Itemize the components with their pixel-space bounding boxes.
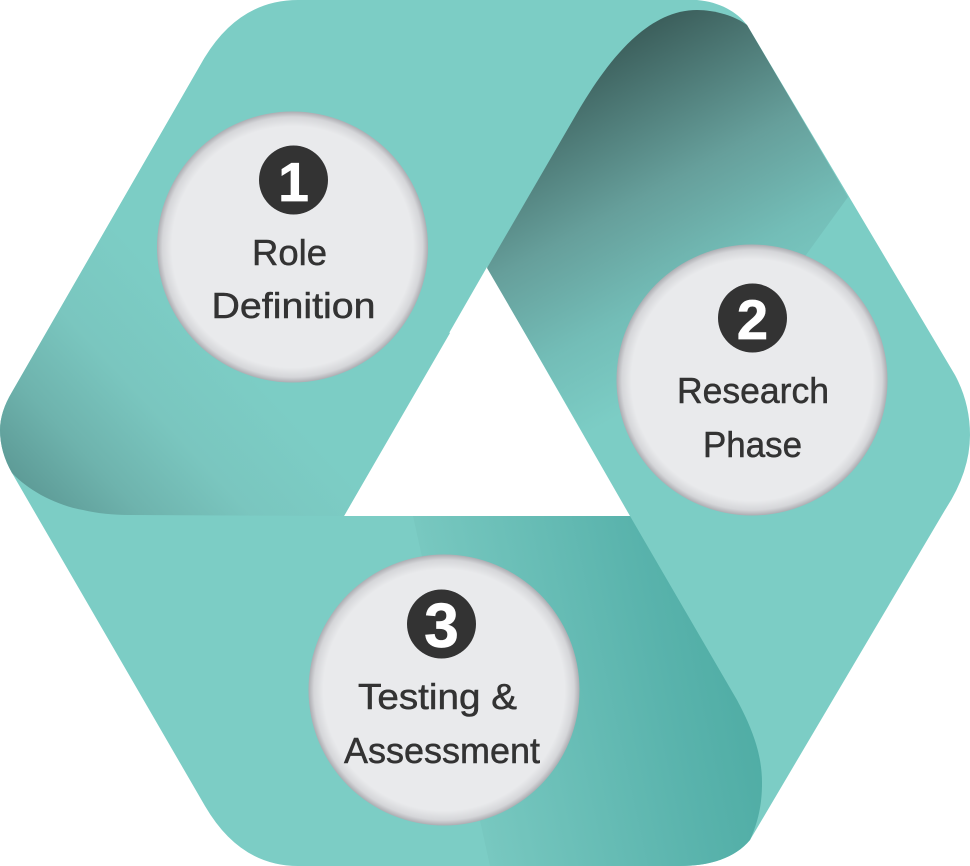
step 2 label: Research — [677, 370, 829, 411]
step 1 disc — [157, 112, 428, 382]
step 2 label: Phase — [703, 424, 802, 465]
step 2 number badge — [718, 284, 787, 352]
step 1 number badge — [259, 146, 328, 214]
step 1 label: Definition — [212, 285, 376, 326]
shaded fold: top right — [487, 10, 848, 505]
shaded fold: lower left — [0, 57, 450, 516]
step 3 label: Assessment — [344, 730, 540, 771]
step 1 label — [212, 232, 376, 326]
step 2 number badge: 2 — [737, 288, 768, 351]
step 3 label: Testing & — [358, 676, 517, 717]
step 2 label — [677, 370, 829, 465]
step 3 number badge — [407, 590, 476, 661]
step 1: Role Definition — [157, 112, 428, 382]
step 1 number badge: 1 — [278, 151, 309, 213]
shaded fold: lower right — [413, 516, 762, 866]
step 3 label — [344, 676, 540, 771]
step 1 label: Role — [252, 232, 327, 273]
step 2 disc — [616, 244, 888, 516]
center white triangle — [344, 267, 630, 516]
step 3 number badge: 3 — [424, 592, 459, 661]
step 2: Research Phase — [616, 244, 888, 516]
step 3 disc — [308, 554, 580, 826]
step 3: Testing & Assessment — [308, 554, 580, 826]
